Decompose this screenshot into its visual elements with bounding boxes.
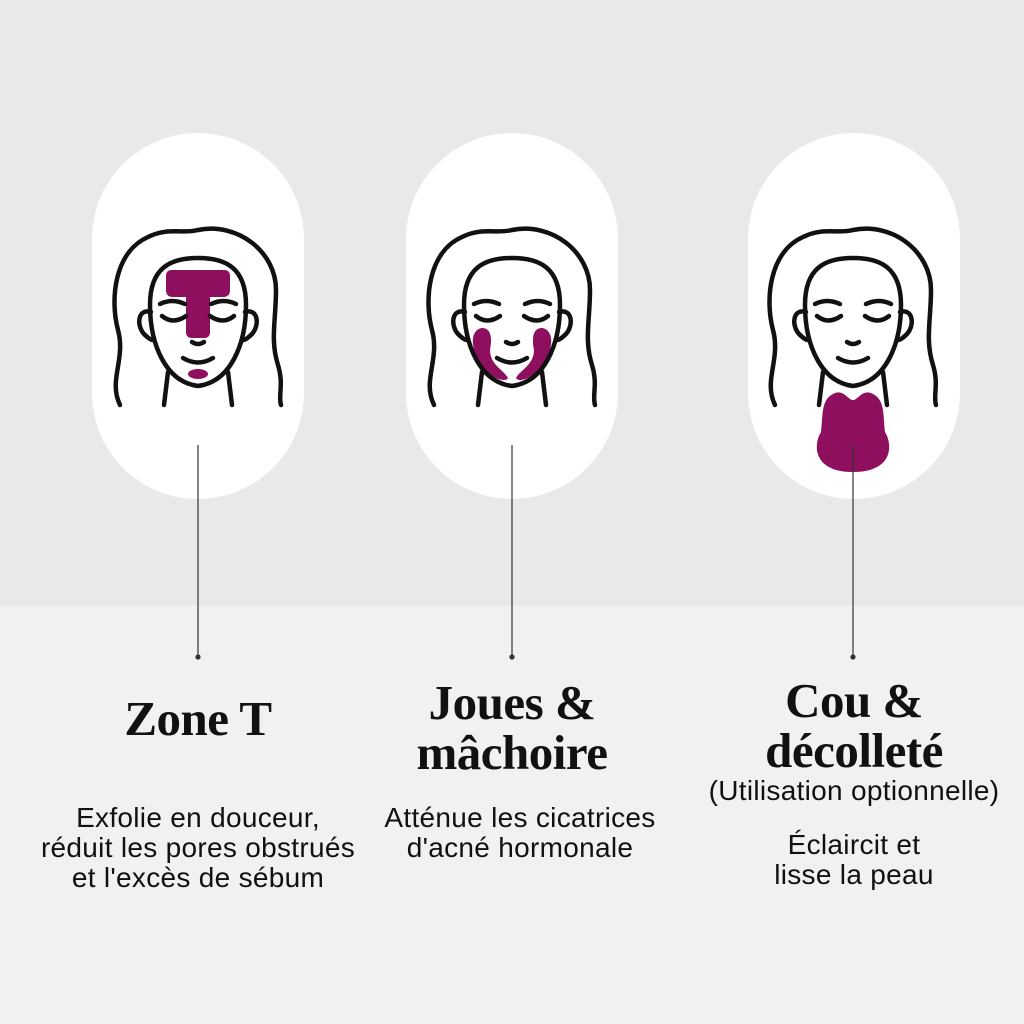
title: Cou & décolleté: Cou & <box>785 673 923 728</box>
title: Joues & mâchoire: Joues & <box>429 675 595 730</box>
icon: face cheeks jaw <box>428 229 595 405</box>
title: Cou & décolleté: décolleté <box>765 723 943 778</box>
text: joues <box>384 802 656 863</box>
icon: face T zone <box>114 229 281 405</box>
text: joues: d'acné hormonale <box>407 832 633 863</box>
icon: face neck <box>769 229 936 472</box>
title: Joues & mâchoire <box>416 675 608 780</box>
text: cou: Éclaircit et <box>788 829 920 860</box>
text: cou <box>774 829 934 890</box>
pill: joues <box>406 133 618 499</box>
text: zone T: et l'excès de sébum <box>72 862 324 893</box>
connector lines <box>196 445 855 659</box>
pill: cou <box>748 133 960 499</box>
text: joues: Atténue les cicatrices <box>384 802 656 833</box>
text: zone T <box>41 802 355 893</box>
text: zone T: réduit les pores obstrués <box>41 832 355 863</box>
pill: zone T <box>92 133 304 499</box>
text: zone T: Exfolie en douceur, <box>76 802 320 833</box>
text: cou: lisse la peau <box>774 859 934 890</box>
title: Joues & mâchoire: mâchoire <box>416 725 608 780</box>
title: Cou & décolleté <box>765 673 943 778</box>
title: Zone T: Zone T <box>124 691 272 746</box>
text: optional: (Utilisation optionnelle) <box>709 775 999 806</box>
